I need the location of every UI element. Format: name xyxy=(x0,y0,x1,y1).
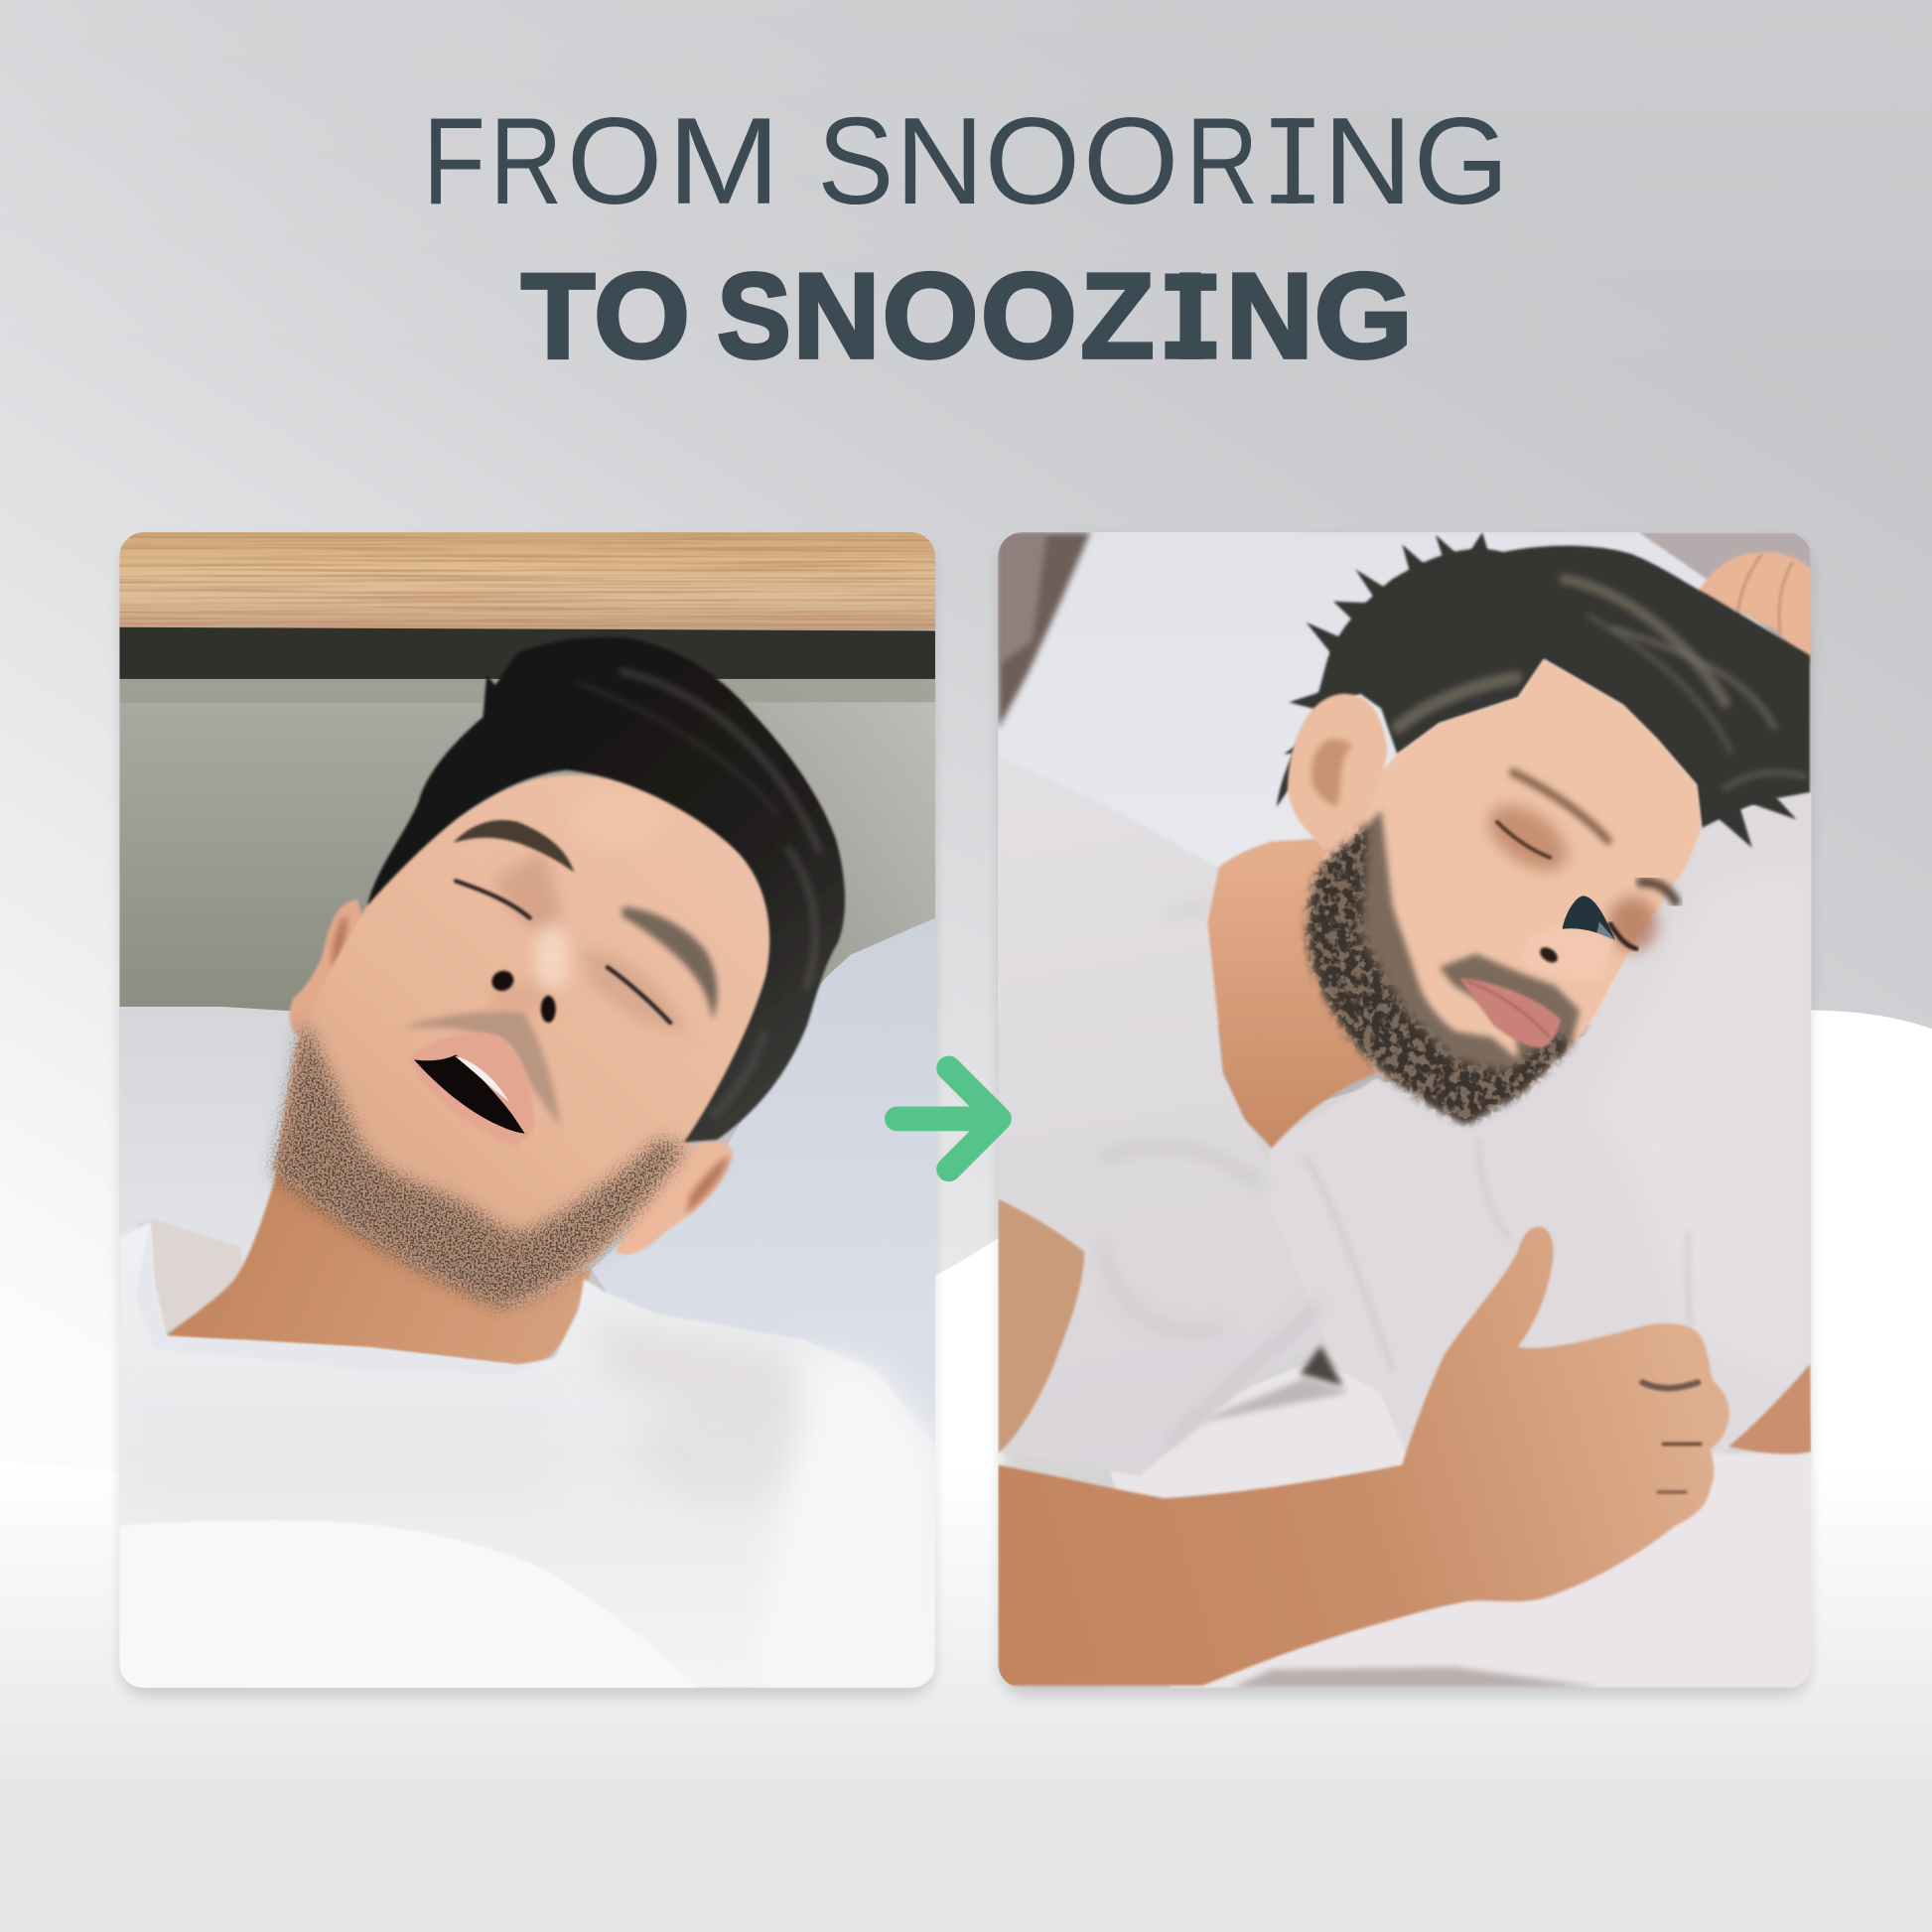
shirt folds xyxy=(1103,905,1318,1442)
right eyebrow xyxy=(622,906,717,1021)
ear xyxy=(1288,694,1387,850)
title line 2: T xyxy=(521,248,595,383)
ear right xyxy=(617,1142,733,1255)
hair xyxy=(367,637,845,1142)
title line 1 letter I serifs xyxy=(1271,118,1314,204)
shirt right xyxy=(998,758,1323,1476)
hair xyxy=(1277,546,1810,828)
face xyxy=(1309,659,1702,1119)
sheet crease xyxy=(1300,1345,1343,1386)
title line 1: S xyxy=(817,93,894,230)
title line 2: S xyxy=(717,248,791,383)
moustache xyxy=(403,1012,561,1128)
panel: after photo, man sleeping xyxy=(998,532,1811,1688)
fingers xyxy=(1697,552,1811,665)
shirt shoulder shading xyxy=(148,1318,935,1688)
teeth xyxy=(455,1056,509,1102)
pillow base xyxy=(998,532,1811,1026)
bottom strip xyxy=(1232,1667,1601,1688)
beard texture xyxy=(1308,823,1571,1124)
title xyxy=(423,93,1509,383)
right side arm xyxy=(1728,1364,1811,1454)
title line 2: O xyxy=(883,248,978,383)
hair highlights xyxy=(579,671,819,1115)
left eyebrow xyxy=(454,820,574,873)
title line 1: G xyxy=(1414,93,1509,230)
title line 1: N xyxy=(896,93,984,230)
title line 1: M xyxy=(667,93,780,230)
title line 1: R xyxy=(1185,93,1259,230)
nostril xyxy=(1537,944,1561,966)
top right background xyxy=(1639,532,1811,665)
face xyxy=(274,775,771,1307)
nostrils xyxy=(488,967,556,1023)
title line 1: F xyxy=(423,93,485,230)
shirt xyxy=(119,1222,935,1688)
stubble texture xyxy=(274,1021,685,1307)
title line 1: I xyxy=(1276,93,1311,230)
lips xyxy=(1460,978,1561,1047)
title line 2: O xyxy=(981,248,1077,383)
title line 1: O xyxy=(1083,93,1178,230)
wall xyxy=(119,679,935,1011)
title line 2: G xyxy=(1314,248,1413,383)
knuckles and finger gaps xyxy=(1642,1382,1701,1492)
title line 2: I xyxy=(1173,248,1207,383)
white wave xyxy=(0,1011,1932,1932)
right eye xyxy=(608,967,670,1023)
upper arm xyxy=(998,1199,1084,1453)
title line 2 letter I serifs xyxy=(1165,274,1216,359)
face shading xyxy=(495,853,683,1032)
lips xyxy=(409,1033,534,1146)
lower pillow xyxy=(1269,788,1811,1478)
nose xyxy=(1524,926,1614,980)
stubble soft tone xyxy=(274,1021,685,1307)
hair highlights xyxy=(1399,579,1805,788)
eye 1 xyxy=(1497,822,1550,858)
title line 2: N xyxy=(1226,248,1313,383)
bed sheet xyxy=(1109,1359,1811,1688)
title line 2: N xyxy=(793,248,880,383)
title line 1: O xyxy=(567,93,662,230)
neck xyxy=(167,1171,592,1365)
eyebrow 1 xyxy=(1513,772,1608,840)
collar xyxy=(136,1222,542,1375)
arm and hand xyxy=(998,1227,1729,1686)
arrow xyxy=(897,1068,1000,1170)
neck xyxy=(1207,838,1376,1149)
dark corner xyxy=(998,532,1090,730)
hair tufts xyxy=(1284,532,1796,848)
title line 2: O xyxy=(594,248,690,383)
pillow left xyxy=(119,1007,301,1265)
pillow right xyxy=(592,918,935,1453)
foreground shape xyxy=(119,1520,700,1688)
nose strip xyxy=(1563,896,1615,940)
left eye xyxy=(456,881,530,918)
eye shadow xyxy=(1477,792,1657,951)
title line 1: R xyxy=(489,93,562,230)
eye 2 xyxy=(1610,924,1636,949)
ear left xyxy=(290,899,364,1037)
dark band xyxy=(119,627,935,679)
panel: before photo, man snoring xyxy=(119,532,935,1688)
title line 1: N xyxy=(1323,93,1413,230)
open mouth xyxy=(414,1054,525,1134)
card shadows xyxy=(122,542,1809,1696)
title line 1: O xyxy=(985,93,1080,230)
beard soft tone xyxy=(1308,811,1580,1124)
wooden headboard xyxy=(119,532,935,629)
eyebrow 2 xyxy=(1641,882,1676,901)
shirt back collar xyxy=(136,1220,246,1330)
title line 2: Z xyxy=(1080,248,1155,383)
